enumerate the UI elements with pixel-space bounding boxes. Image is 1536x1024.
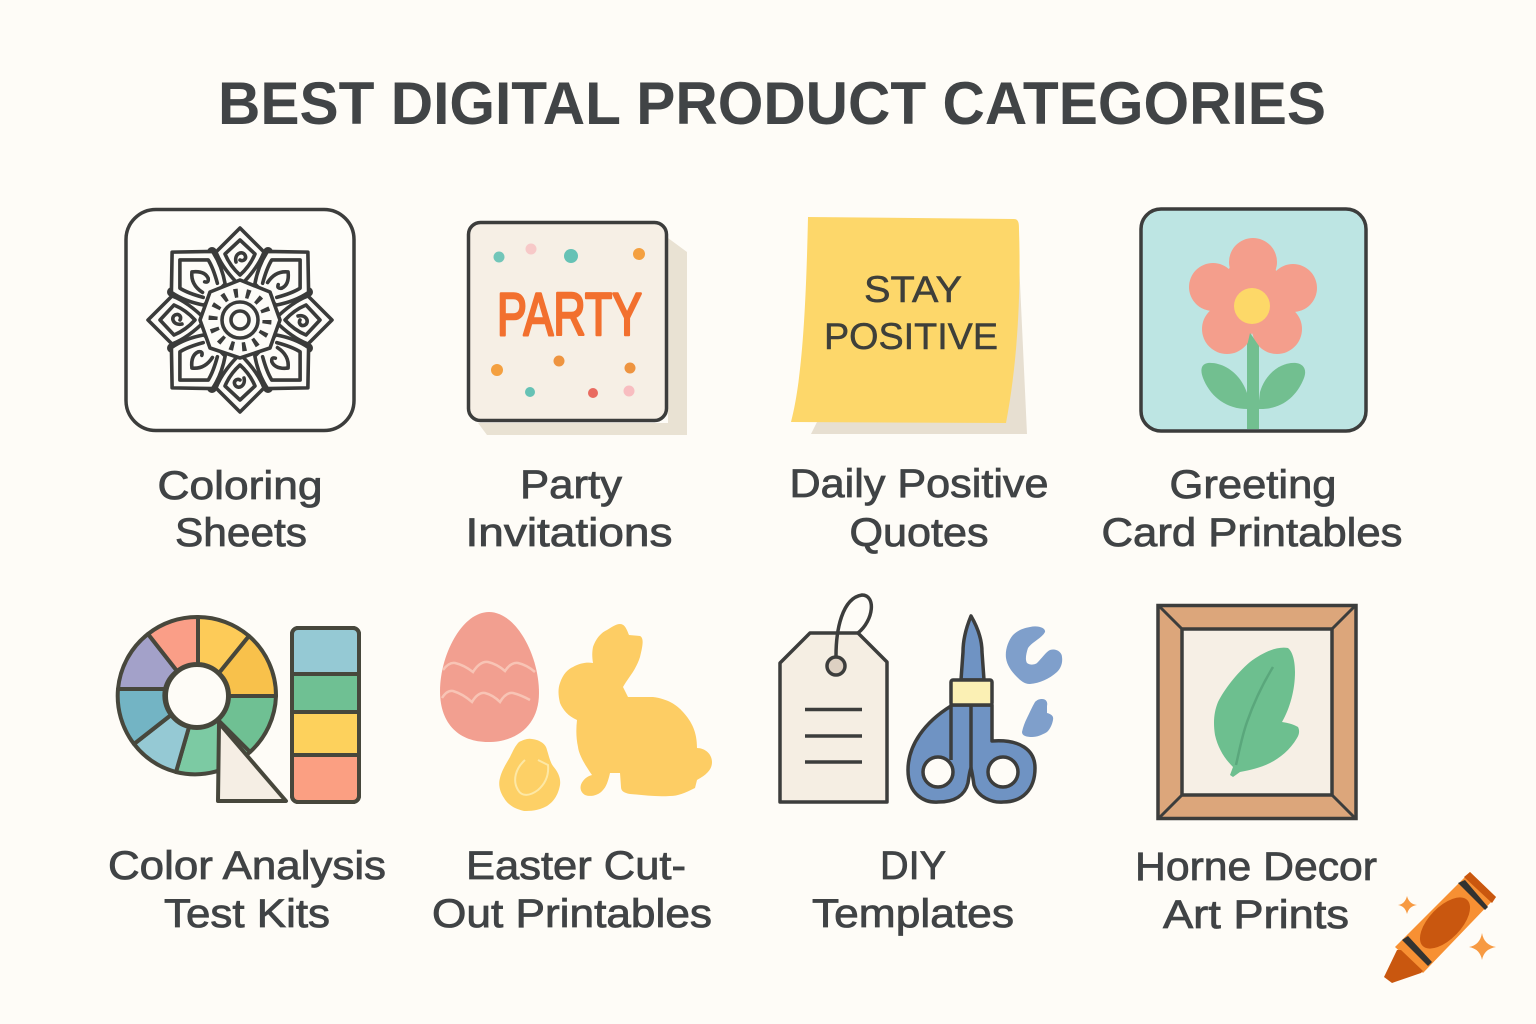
icon: small chick bbox=[499, 739, 560, 811]
icon: note text: STAY bbox=[864, 269, 962, 310]
icon: rounded card bbox=[126, 210, 354, 430]
panel: coloring sheets bbox=[126, 210, 354, 555]
panel: greeting card printables bbox=[1102, 209, 1402, 555]
icon: tag bbox=[780, 633, 887, 802]
icon: card bbox=[1141, 209, 1366, 431]
icon: scissors bbox=[908, 616, 1035, 802]
decorative frame corners bbox=[1158, 605, 1356, 819]
icon: sparkle bbox=[1398, 896, 1417, 914]
panel: party invitations bbox=[466, 222, 687, 555]
panel: easter cut-out printables bbox=[432, 612, 712, 936]
icon: tag lines bbox=[805, 710, 862, 762]
icon: mandala bbox=[148, 228, 332, 412]
icon: leaf bbox=[1214, 648, 1299, 777]
label: Invitations bbox=[466, 511, 672, 555]
label: Coloring bbox=[158, 464, 322, 508]
icon: flower bbox=[1189, 238, 1317, 429]
label: Out Printables bbox=[432, 892, 712, 936]
icon: card shadow bbox=[478, 238, 687, 435]
icon: blue blob bbox=[1006, 626, 1062, 684]
icon: note shadow bbox=[811, 240, 1027, 434]
icon: egg bbox=[440, 612, 539, 742]
title: BEST DIGITAL PRODUCT CATEGORIES bbox=[218, 70, 1326, 137]
label: Card Printables bbox=[1102, 511, 1402, 555]
label: Greeting bbox=[1170, 463, 1336, 507]
icon: bunny bbox=[558, 624, 712, 796]
icon: tag string bbox=[836, 595, 871, 656]
icon: note text: POSITIVE bbox=[824, 316, 998, 357]
icon: triangle ruler bbox=[218, 723, 286, 801]
panel: daily positive quotes bbox=[790, 217, 1048, 555]
icon: chick detail bbox=[515, 760, 548, 795]
icon: wooden frame bbox=[1158, 606, 1356, 818]
label: Horne Decor bbox=[1135, 845, 1377, 889]
icon: swatch strip bbox=[292, 628, 359, 802]
icon: sticky note bbox=[791, 217, 1020, 423]
label: Art Prints bbox=[1163, 893, 1349, 937]
icon: party card bbox=[468, 222, 666, 420]
label: Templates bbox=[812, 892, 1014, 936]
panel: home decor art prints bbox=[1135, 605, 1377, 937]
label: DIY bbox=[880, 844, 946, 888]
icon: tag hole bbox=[827, 657, 845, 675]
label: Sheets bbox=[175, 511, 307, 555]
icon: colour wheel bbox=[118, 617, 276, 774]
label: Easter Cut- bbox=[466, 844, 686, 888]
label: Daily Positive bbox=[790, 462, 1048, 506]
panel: color analysis test kits bbox=[108, 617, 386, 936]
panel: diy templates bbox=[780, 595, 1062, 936]
label: Color Analysis bbox=[108, 844, 386, 888]
icon: party text: PARTY bbox=[497, 281, 642, 348]
icon: confetti bbox=[491, 244, 645, 398]
icon: sparkle bbox=[1469, 933, 1496, 960]
label: Party bbox=[520, 463, 622, 507]
icon: artwork mat bbox=[1182, 629, 1332, 795]
icon: leaf vein bbox=[1236, 667, 1273, 765]
icon: egg waves bbox=[442, 662, 535, 702]
icon: blue blob bbox=[1022, 699, 1053, 737]
label: Quotes bbox=[850, 511, 988, 555]
icon: crayon bbox=[1384, 872, 1496, 983]
label: Test Kits bbox=[164, 892, 330, 936]
